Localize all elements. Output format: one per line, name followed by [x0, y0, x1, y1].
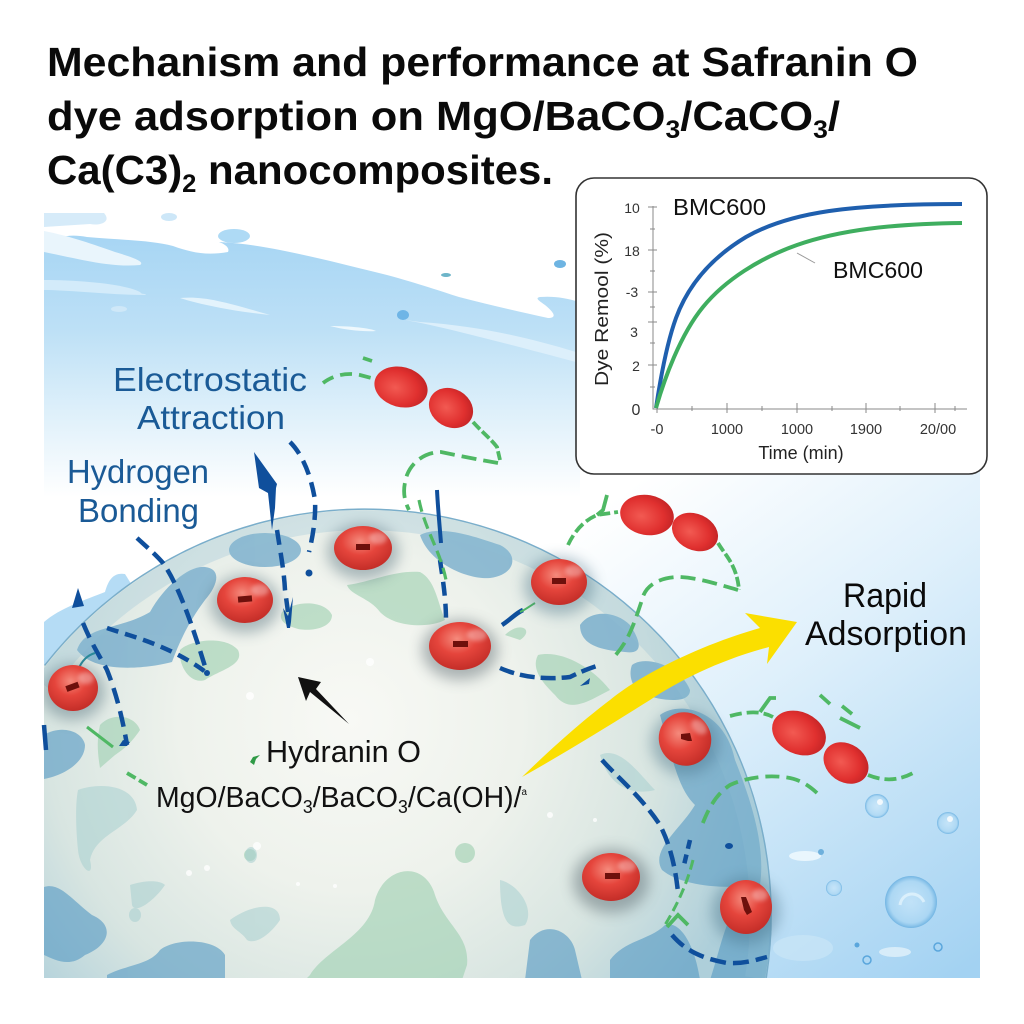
title: /CaCO	[680, 93, 813, 139]
x tick labels	[651, 422, 956, 438]
dashed blue adsorption arrows	[44, 442, 767, 963]
x tick labels: 1900	[850, 422, 882, 438]
curve: BMC600 blue	[656, 204, 962, 408]
label: rapid adsorption: Rapid	[843, 577, 927, 615]
y tick labels: 18	[624, 243, 640, 259]
x axis title: Time (min)	[758, 443, 844, 463]
x tick labels: 1000	[781, 422, 813, 438]
y tick labels: 3	[630, 324, 638, 340]
blue arrowheads	[72, 452, 733, 849]
negative dye ion 7	[573, 849, 649, 913]
label: electrostatic attraction: Attraction	[137, 399, 285, 436]
negative dye ion 2	[210, 575, 280, 633]
label: composite formula: 3	[398, 797, 408, 817]
title	[47, 39, 918, 198]
y tick labels	[624, 200, 641, 419]
label: hydrogen bonding	[67, 453, 209, 529]
title: 2	[182, 170, 196, 198]
small green mark near label	[250, 755, 260, 765]
series label top: BMC600	[673, 194, 766, 220]
y tick labels: -3	[626, 284, 638, 300]
x tick labels: -0	[651, 422, 663, 438]
title: Mechanism and performance at Safranin O	[47, 39, 918, 85]
negative dye ion 5	[524, 557, 594, 615]
blue patches	[44, 531, 772, 980]
negative dye ion 4	[422, 620, 498, 680]
y tick labels: 10	[624, 200, 640, 216]
label: composite formula: 3	[303, 797, 313, 817]
sphere: nanocomposite particle	[44, 508, 772, 980]
title: 3	[813, 116, 828, 144]
label: electrostatic attraction	[113, 361, 307, 436]
label: composite formula: /Ca(OH)/	[408, 782, 522, 814]
Safranin O molecule B	[617, 491, 724, 558]
dashed green dye pathways	[78, 358, 913, 927]
label: hydrogen bonding: Bonding	[78, 492, 199, 529]
Safranin O molecule A	[370, 361, 480, 436]
negative dye ion 6	[649, 703, 721, 775]
title: nanocomposites.	[196, 147, 553, 193]
curve: BMC600 green	[656, 223, 962, 408]
black arrow	[298, 677, 349, 724]
chart axes	[648, 206, 967, 413]
title: dye adsorption on MgO/BaCO	[47, 93, 630, 139]
label: composite formula: MgO/BaCO	[156, 782, 306, 814]
panel: water background	[44, 213, 980, 978]
negative dye ion 8	[712, 878, 780, 944]
green patches	[98, 572, 610, 980]
label: rapid adsorption: Adsorption	[805, 615, 967, 653]
white specks	[186, 658, 597, 888]
x tick labels: 20/00	[920, 422, 956, 438]
x tick labels: 1000	[711, 422, 743, 438]
y axis title: Dye Remool (%)	[592, 232, 612, 386]
rim band	[44, 510, 768, 881]
label: composite formula: /BaCO	[313, 782, 398, 814]
yellow arrow: rapid adsorption	[522, 613, 797, 777]
series label bottom: BMC600	[833, 257, 923, 283]
label: rapid adsorption	[805, 577, 967, 653]
label: hydrogen bonding: Hydrogen	[67, 453, 209, 490]
label: composite formula: a	[522, 787, 527, 798]
title: 3	[665, 116, 680, 144]
pale teal patches	[76, 753, 655, 941]
negative dye ion 3	[41, 664, 105, 720]
label: electrostatic attraction: Electrostatic	[113, 361, 307, 398]
title: /	[828, 93, 840, 139]
title: Ca(C3)	[47, 147, 179, 193]
label: hydranin O: Hydranin O	[266, 734, 421, 769]
y tick labels: 0	[632, 402, 641, 419]
negative dye ion 1	[327, 524, 399, 580]
Safranin O molecule C	[765, 702, 877, 792]
panel: kinetics chart	[576, 178, 987, 474]
water bubbles	[773, 794, 959, 964]
y tick labels: 2	[632, 358, 640, 374]
